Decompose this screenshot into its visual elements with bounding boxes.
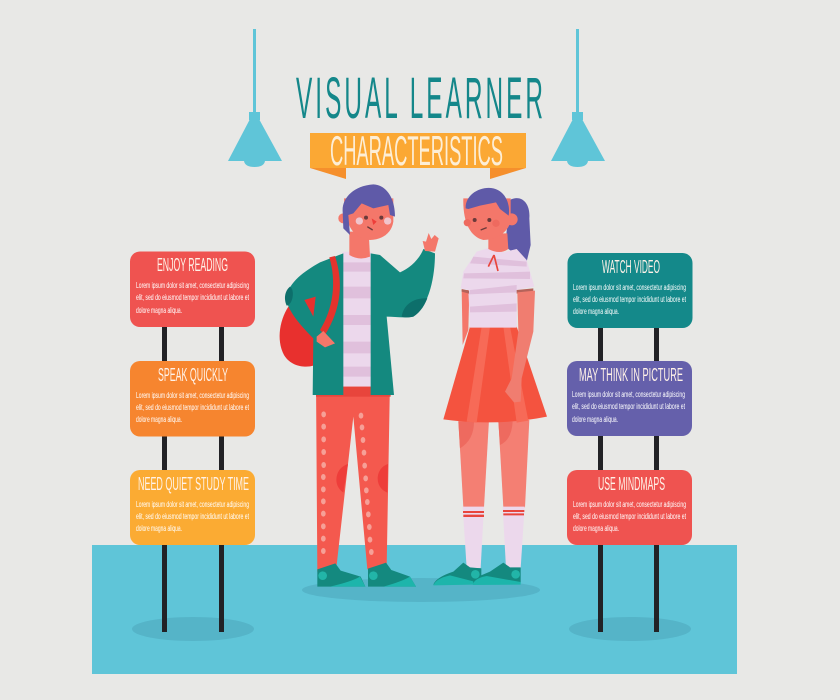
girl socks [463,507,525,568]
sign: may think in picture: dolore magna aliqua. [572,415,618,424]
sign: enjoy reading: ENJOY READING [157,255,228,275]
ribbon banner [310,127,526,179]
boy head [338,184,395,258]
sign: speak quickly: Lorem ipsum dolor sit amet, consectetur adipiscing [136,391,249,400]
sign: need quiet study time: elit, sed do eiusmod tempor incididunt ut labore et [136,512,250,521]
sign: speak quickly [130,361,255,436]
sign: use mindmaps: dolore magna aliqua. [573,524,619,533]
girl blouse [461,248,534,328]
sign: may think in picture: elit, sed do eiusmod tempor incididunt ut labore et [572,402,686,411]
boy backpack [280,303,327,367]
sign: may think in picture [567,361,692,436]
sign: watch video: Lorem ipsum dolor sit amet, consectetur adipiscing [573,283,686,292]
boy knee patches [336,464,388,493]
boy trouser dots [321,411,374,555]
right lamp [551,29,605,167]
sign: watch video: WATCH VIDEO [602,257,660,277]
characters: upper bodies [280,184,535,402]
girl shoes [433,563,521,585]
characters: lower bodies [316,327,547,587]
boy shoes [317,563,416,587]
sign: use mindmaps: elit, sed do eiusmod tempor incididunt ut labore et [573,512,687,521]
boy trousers [316,380,390,572]
sign: watch video [568,253,692,328]
boy bag strap [320,256,340,335]
sign: use mindmaps: USE MINDMAPS [598,474,665,494]
right sign posts [569,328,691,641]
girl right arm and hand [505,291,535,402]
floor shadow under characters [302,578,540,602]
sign: need quiet study time [130,470,255,545]
sign: speak quickly: elit, sed do eiusmod tempor incididunt ut labore et [136,403,250,412]
sign: need quiet study time: NEED QUIET STUDY TIME [138,474,249,494]
boy jacket and shirt [285,249,435,397]
sign: speak quickly: dolore magna aliqua. [136,415,182,424]
sign: need quiet study time: dolore magna aliqua. [136,524,182,533]
girl left arm [462,290,469,345]
sign: watch video: dolore magna aliqua. [573,307,619,316]
text: CHARACTERISTICS [330,127,503,174]
left lamp [228,29,282,167]
sign: enjoy reading [130,252,255,327]
title: VISUAL LEARNER [296,67,543,131]
girl legs [458,420,529,507]
girl head [463,188,518,252]
left sign posts [132,327,254,641]
boy hands [317,233,439,347]
sign: enjoy reading: elit, sed do eiusmod tempor incididunt ut labore et [136,293,250,302]
sign: watch video: elit, sed do eiusmod tempor incididunt ut labore et [573,295,687,304]
sign: need quiet study time: Lorem ipsum dolor sit amet, consectetur adipiscing [136,500,249,509]
sign: speak quickly: SPEAK QUICKLY [158,365,228,385]
sign: enjoy reading: Lorem ipsum dolor sit amet, consectetur adipiscing [136,281,249,290]
girl ponytail [505,198,531,262]
sign: may think in picture: MAY THINK IN PICTURE [579,365,683,385]
girl skirt [443,327,547,423]
sign: use mindmaps: Lorem ipsum dolor sit amet, consectetur adipiscing [573,500,686,509]
sign: enjoy reading: dolore magna aliqua. [136,306,182,315]
floor [92,545,737,674]
sign: use mindmaps [567,470,692,545]
sign: may think in picture: Lorem ipsum dolor sit amet, consectetur adipiscing [572,390,685,399]
